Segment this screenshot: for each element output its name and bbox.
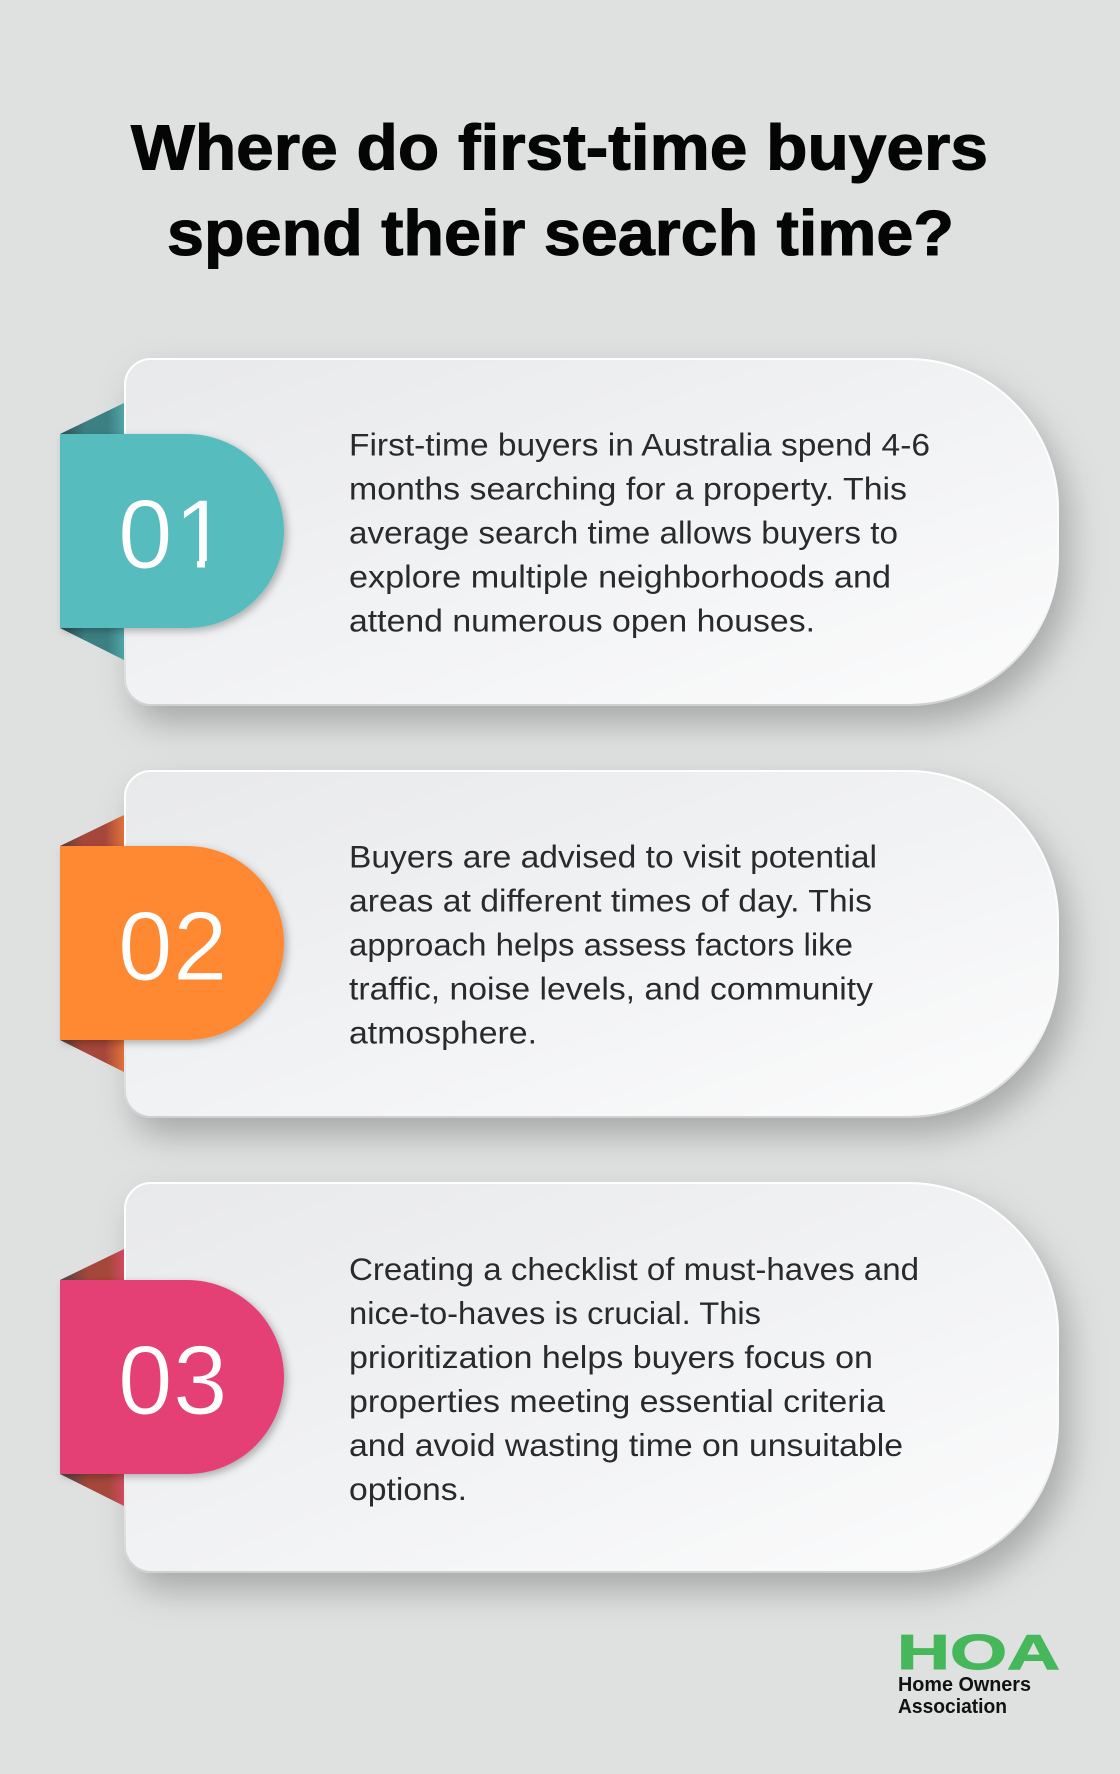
- logo wordmark: [898, 1674, 1031, 1718]
- panel: step 1: [60, 359, 1058, 705]
- number badge 2: [60, 846, 284, 1040]
- number badge 1: [60, 434, 284, 628]
- text block 2: [349, 839, 877, 1051]
- number 03: 03: [118, 1325, 228, 1435]
- text block 3: [349, 1251, 919, 1507]
- card 1 background: [125, 359, 1058, 705]
- text block 1: attend numerous open houses.: [349, 603, 815, 639]
- logo: HOA Home Owners Association: [897, 1626, 1060, 1718]
- ribbon fold bottom 2: [60, 1040, 124, 1072]
- text block 3: and avoid wasting time on unsuitable: [349, 1427, 903, 1463]
- panel: step 3: [60, 1183, 1058, 1572]
- text block 2: traffic, noise levels, and community: [349, 971, 873, 1007]
- text block 3: properties meeting essential criteria: [349, 1383, 886, 1419]
- logo wordmark: Home Owners: [898, 1674, 1031, 1696]
- title: Where do first-time buyers: [131, 112, 988, 184]
- number badge 3: [60, 1280, 284, 1474]
- logo wordmark: Association: [898, 1696, 1007, 1718]
- text block 1: average search time allows buyers to: [349, 515, 898, 551]
- text block 2: atmosphere.: [349, 1015, 537, 1051]
- text block 2: approach helps assess factors like: [349, 927, 853, 963]
- panel: step 2: [60, 771, 1058, 1117]
- text block 3: nice-to-haves is crucial. This: [349, 1295, 761, 1331]
- ribbon fold top 2: [60, 815, 124, 846]
- title: [131, 112, 988, 269]
- card 3 background: [125, 1183, 1058, 1572]
- ribbon fold top 3: [60, 1249, 124, 1280]
- text block 3: prioritization helps buyers focus on: [349, 1339, 873, 1375]
- logo mark HOA: HOA: [897, 1626, 1060, 1680]
- text block 3: Creating a checklist of must-haves and: [349, 1251, 919, 1287]
- card 2 background: [125, 771, 1058, 1117]
- text block 1: [349, 427, 930, 639]
- text block 1: explore multiple neighborhoods and: [349, 559, 891, 595]
- text block 1: months searching for a property. This: [349, 471, 907, 507]
- ribbon fold bottom 3: [60, 1474, 124, 1506]
- ribbon fold top 1: [60, 403, 124, 434]
- number 02: 02: [118, 891, 228, 1001]
- title: spend their search time?: [167, 197, 954, 269]
- ribbon fold bottom 1: [60, 628, 124, 660]
- text block 1: First-time buyers in Australia spend 4-6: [349, 427, 930, 463]
- text block 2: areas at different times of day. This: [349, 883, 872, 919]
- text block 2: Buyers are advised to visit potential: [349, 839, 877, 875]
- number 01: 01: [118, 479, 229, 589]
- text block 3: options.: [349, 1471, 467, 1507]
